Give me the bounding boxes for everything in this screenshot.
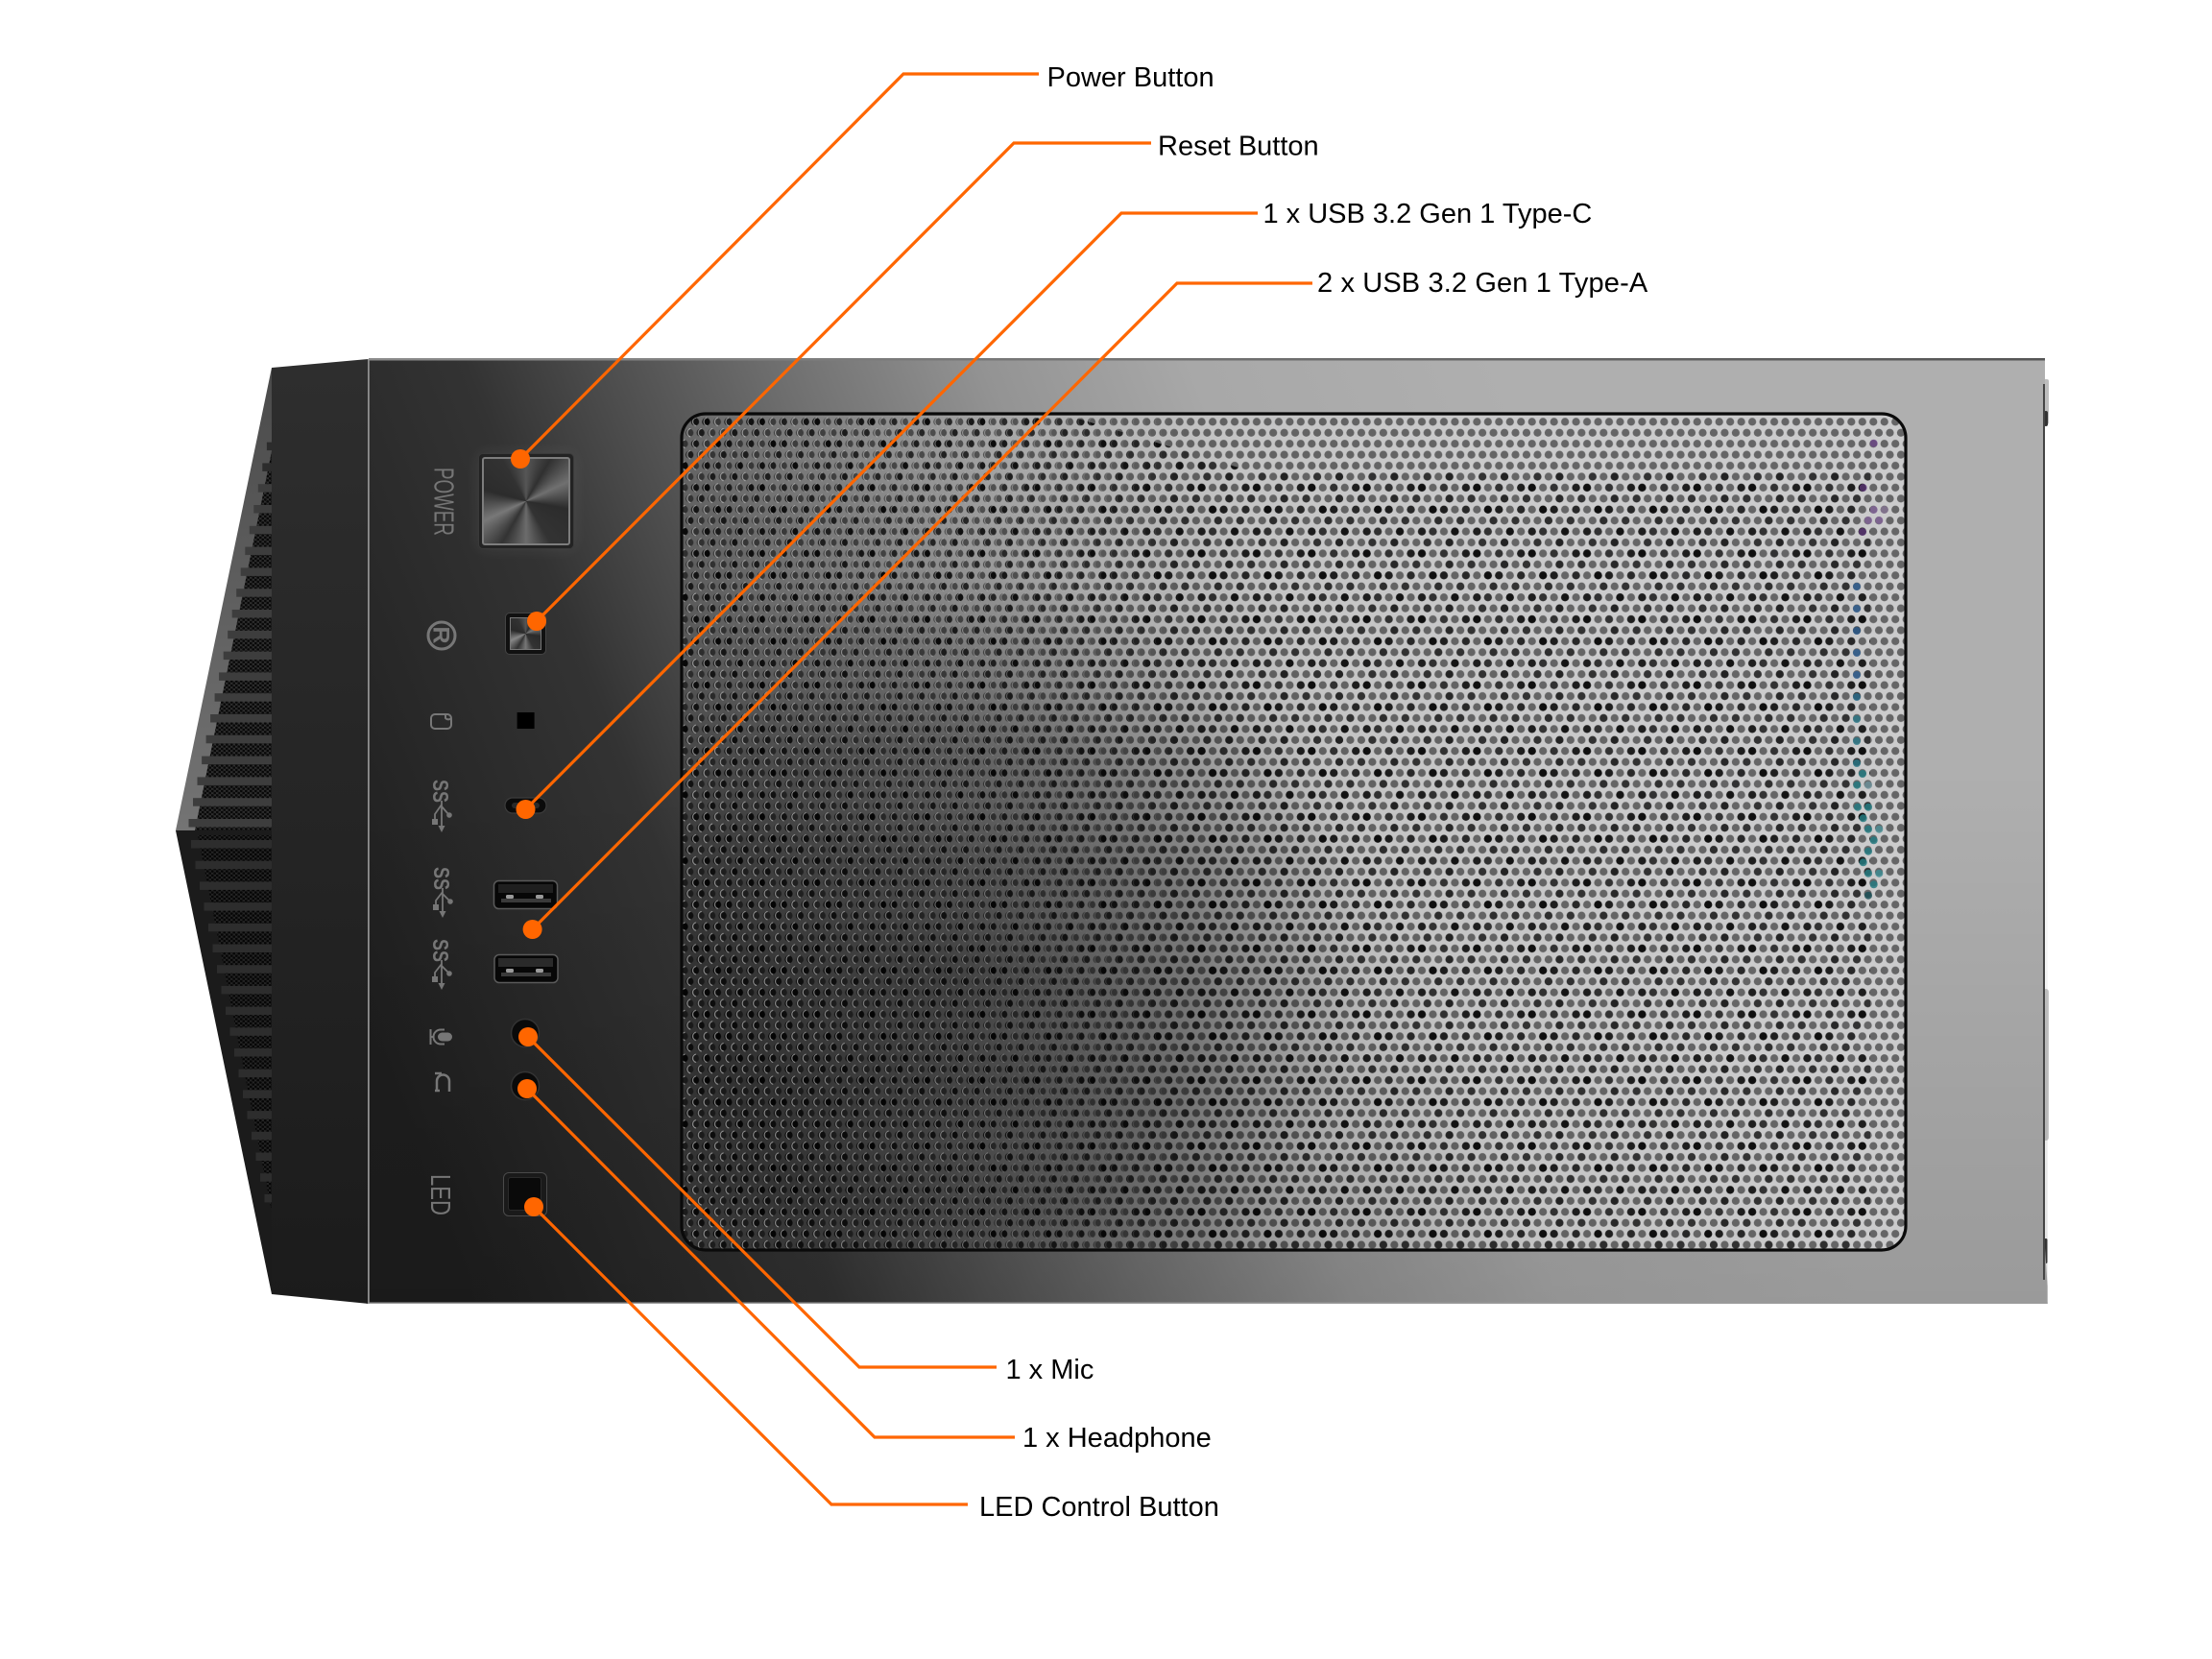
icon: drive activity [431, 714, 451, 729]
buttons [478, 454, 573, 1216]
callout: Headphone [517, 1079, 1212, 1454]
lower vent slats [191, 840, 273, 1202]
panel: angled left bevel [176, 359, 369, 1304]
icon: reset R [428, 622, 455, 649]
purple light through holes [1859, 440, 1888, 536]
label: POWER: POWER [428, 468, 459, 536]
lower vent mesh [198, 835, 272, 1212]
icon: reset R: R [428, 626, 453, 643]
callout: Mic [518, 1027, 1094, 1385]
icon: SuperSpeed USB 3 [428, 939, 453, 990]
button: LED control [503, 1172, 547, 1216]
perforation holes [680, 412, 1906, 1252]
indicator: drive LED window [517, 712, 535, 729]
fan shadow behind mesh [682, 414, 1906, 1250]
icon: microphone [430, 1029, 452, 1045]
callout: USB Type-A: 2 x USB 3.2 Gen 1 Type-A [1317, 268, 1648, 299]
mesh plate [682, 414, 1906, 1250]
port: USB Type-A upper [493, 881, 557, 908]
callout: Reset Button [527, 131, 1319, 631]
label: LED: LED [424, 1174, 455, 1215]
icons and labels column [424, 468, 459, 1215]
icon: SuperSpeed USB 3: SS [428, 939, 453, 962]
lower black facet [176, 830, 272, 1294]
icon: SuperSpeed USB 1: SS [428, 780, 453, 803]
callout: Mic: 1 x Mic [1006, 1355, 1094, 1385]
upper vent slats [188, 443, 273, 828]
callout: USB Type-A [523, 268, 1648, 939]
callout: LED Control Button [524, 1197, 1219, 1523]
bevel front strip [272, 359, 369, 1304]
icon: SuperSpeed USB 2: SS [429, 867, 454, 890]
mesh border [682, 414, 1906, 1250]
port: headphone jack [511, 1071, 540, 1100]
callout: Reset Button: Reset Button [1158, 131, 1319, 161]
button: power [478, 453, 574, 549]
panel: perforated mesh [680, 412, 1906, 1252]
port: mic jack [511, 1020, 540, 1046]
callout: Power Button [511, 62, 1214, 469]
callout: LED Control Button: LED Control Button [979, 1492, 1219, 1523]
callout: USB Type-C [517, 199, 1592, 819]
blue light through holes [1853, 583, 1861, 767]
icon: SuperSpeed USB 2 [429, 867, 454, 918]
upper grey facet [176, 368, 272, 830]
icon: headphone [435, 1073, 449, 1092]
port: USB Type-C [505, 798, 546, 813]
case surface [369, 359, 2048, 1304]
callout: Headphone: 1 x Headphone [1022, 1423, 1212, 1454]
callout: Power Button: Power Button [1046, 62, 1214, 93]
button: reset [505, 613, 546, 655]
icon: SuperSpeed USB 1 [428, 780, 453, 832]
upper vent mesh [195, 451, 272, 830]
port: USB Type-A lower [494, 954, 558, 983]
callout: USB Type-C: 1 x USB 3.2 Gen 1 Type-C [1263, 199, 1592, 229]
right edge tabs [2043, 379, 2049, 1263]
panel: case front body [368, 358, 2049, 1304]
teal light through holes [1853, 770, 1883, 900]
